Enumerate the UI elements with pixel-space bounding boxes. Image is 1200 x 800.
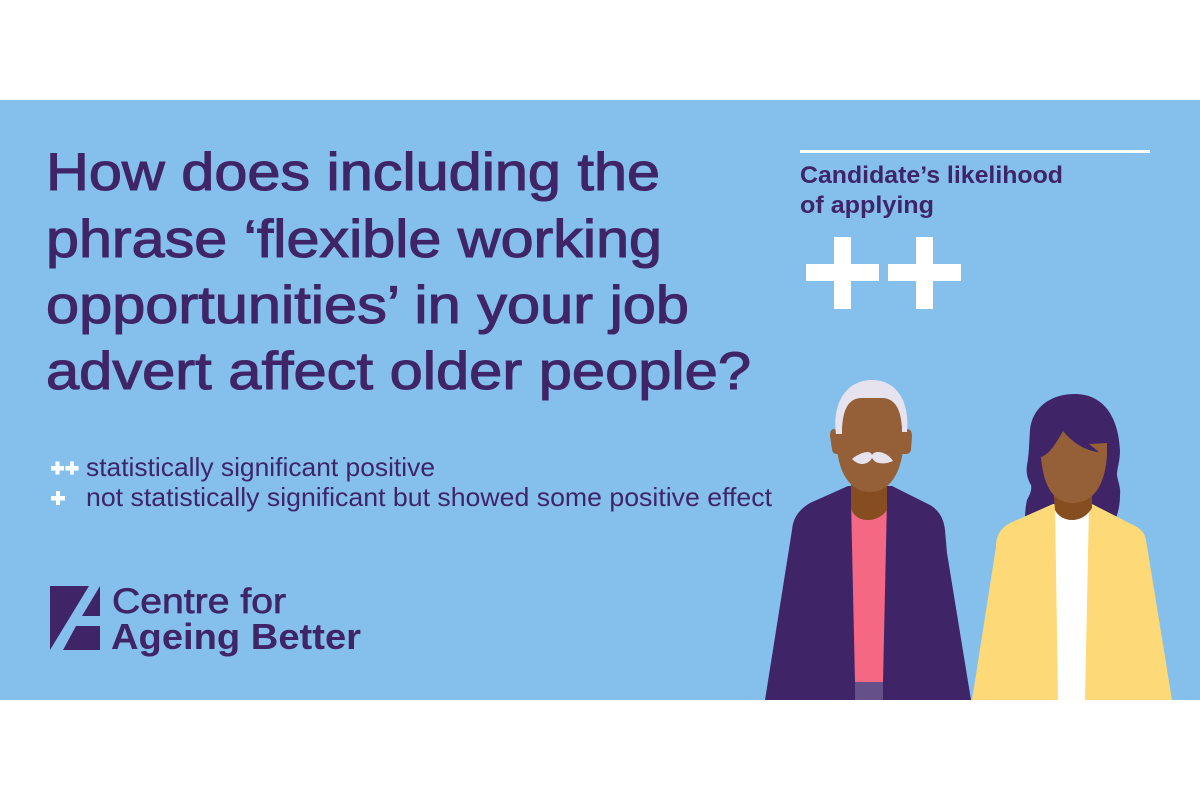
figure: woman [972,394,1172,700]
shirt [851,500,887,682]
jacket [972,504,1172,700]
logo: Centre for Ageing Better [50,582,361,657]
title: How does including the [46,143,660,202]
neck [851,470,887,520]
panel: blue background [0,100,1200,700]
divider line [800,150,1150,153]
legend text: statistically significant positive: statistically significant positive [86,452,435,482]
long hair [1025,394,1120,525]
neck [1053,485,1092,520]
legend: double plus icon [51,462,78,474]
jacket [765,486,971,700]
face [1041,431,1107,503]
rating: double plus [806,237,961,309]
hair [835,380,907,434]
logo: Centre for Ageing Better: Centre for [112,582,286,621]
white top [1055,505,1089,700]
title: advert affect older people? [46,342,751,401]
title: opportunities’ in your job [46,276,689,335]
legend text: not statistically significant: not statistically significant but showed some positive effect [86,482,773,512]
moustache [852,452,893,464]
left ear [830,429,842,454]
trousers [855,682,883,700]
title: phrase ‘flexible working [46,210,662,269]
face [837,398,903,492]
logo: Centre for Ageing Better: Ageing Better [111,616,361,657]
title [46,143,751,401]
right ear [902,429,912,454]
figure: older man [765,380,971,700]
heading: candidate's likelihood [800,162,1063,219]
legend: single plus icon [51,491,65,505]
heading: candidate's likelihood: of applying [800,192,934,219]
heading: candidate's likelihood: Candidate’s likelihood [800,162,1063,189]
